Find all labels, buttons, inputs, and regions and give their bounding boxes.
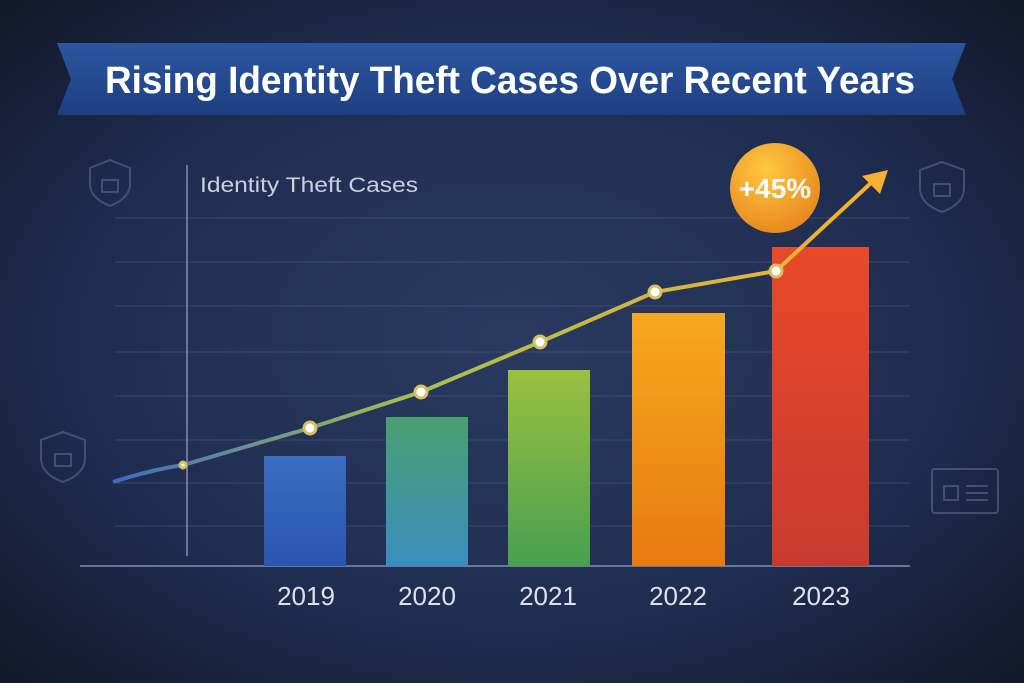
year labels: [277, 581, 850, 611]
year labels: 2019: [277, 581, 335, 611]
year labels: 2020: [398, 581, 456, 611]
icon: shield left: [90, 160, 130, 206]
axis label: Identity Theft Cases: [200, 174, 418, 197]
grid: [115, 218, 910, 526]
icon: shield left lower: [41, 432, 85, 482]
banner: [57, 43, 966, 115]
bar chart: [264, 247, 869, 566]
badge: +45%: [739, 173, 811, 204]
title: Rising Identity Theft Cases Over Recent Years: [105, 60, 915, 102]
year labels: 2021: [519, 581, 577, 611]
icon: id card: [932, 469, 998, 513]
year labels: 2022: [649, 581, 707, 611]
badge: [730, 143, 820, 233]
trend line: [113, 170, 888, 482]
year labels: 2023: [792, 581, 850, 611]
icon: shield right: [920, 162, 964, 212]
axes: [80, 165, 910, 566]
